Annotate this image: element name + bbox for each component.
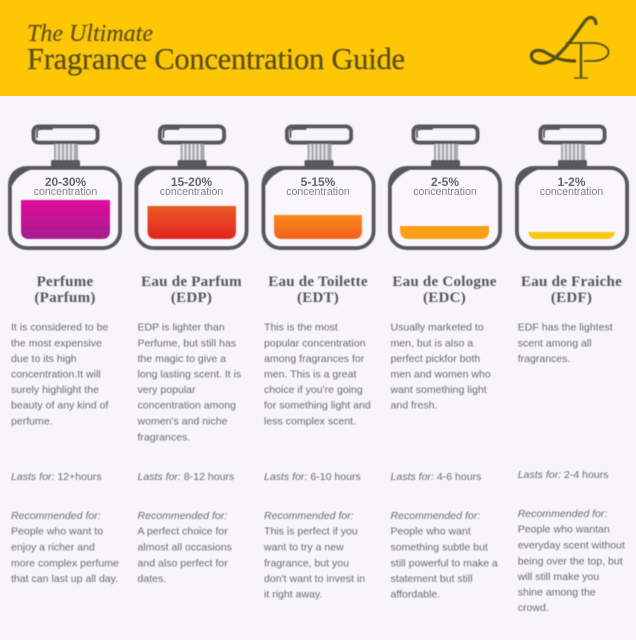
description: perfect pickfor both <box>390 353 480 365</box>
name: Perfume <box>37 274 93 290</box>
liquid level <box>528 232 615 239</box>
recommendation: more complex perfume <box>11 557 119 569</box>
header banner <box>0 0 636 96</box>
description: the magic to give a <box>138 353 226 365</box>
description: very popular <box>138 384 196 396</box>
name: (EDT) <box>297 290 339 306</box>
name: Eau de Parfum <box>141 274 242 290</box>
name <box>392 274 497 306</box>
concentration label: concentration <box>34 186 97 198</box>
name <box>141 274 242 306</box>
name <box>521 274 622 306</box>
liquid level <box>274 215 362 239</box>
description: men. This is a great <box>264 369 356 381</box>
description <box>518 322 613 365</box>
recommendation: People who wantan <box>518 524 610 536</box>
description: men and women who <box>390 369 491 381</box>
recommendation: it right away. <box>264 588 322 600</box>
bottle: eau de toilette 5-15% <box>262 126 374 248</box>
description: long lasting scent. It is <box>138 369 241 381</box>
concentration label: 20-30% <box>45 175 87 189</box>
recommendation: enjoy a richer and <box>11 542 95 554</box>
duration: Lasts for: 8-12 hours <box>138 471 234 483</box>
description: scent among all <box>518 338 592 350</box>
name: (Parfum) <box>34 290 96 306</box>
recommendation: want to try a new <box>263 542 344 554</box>
duration: Lasts for: 4-6 hours <box>390 471 481 483</box>
bottle: eau de fraiche 1-2% <box>515 126 627 248</box>
bottle outline <box>388 126 500 248</box>
description: It is considered to be <box>11 322 108 334</box>
recommendation <box>263 510 365 600</box>
title: The Ultimate <box>27 21 153 47</box>
description: concentration.It will <box>11 369 101 381</box>
description: EDF has the lightest <box>518 322 613 334</box>
concentration label: 2-5% <box>431 175 459 189</box>
recommendation: Recommended for: <box>264 510 354 522</box>
recommendation: almost all occasions <box>138 542 232 554</box>
recommendation <box>138 510 232 585</box>
description: surely highlight the <box>11 384 99 396</box>
column: eau de cologne <box>390 274 498 600</box>
recommendation: will still make you <box>517 571 599 583</box>
name <box>34 274 96 306</box>
recommendation: A perfect choice for <box>138 526 228 538</box>
liquid level <box>400 226 489 239</box>
description: men, but is also a <box>390 338 473 350</box>
description <box>264 322 371 427</box>
description: choice if you're going <box>264 384 363 396</box>
liquid level <box>148 206 236 239</box>
name: (EDP) <box>171 290 212 306</box>
column: eau de fraiche <box>517 274 625 614</box>
description: concentration among <box>138 400 236 412</box>
description: EDP is lighter than <box>138 322 225 334</box>
concentration label: concentration <box>286 186 350 198</box>
description: fragrances. <box>518 353 570 365</box>
description <box>11 322 108 427</box>
column: perfume <box>11 274 119 585</box>
recommendation: Recommended for: <box>518 508 607 520</box>
concentration label: 5-15% <box>301 175 336 189</box>
concentration label: 15-20% <box>171 175 213 189</box>
name: (EDC) <box>423 290 466 306</box>
column: eau de toilette <box>263 274 371 600</box>
recommendation: still powerful to make a <box>390 557 498 569</box>
description: Usually marketed to <box>390 322 484 334</box>
recommendation: something subtle but <box>390 542 488 554</box>
duration: Lasts for: 2-4 hours <box>518 469 609 481</box>
title: Fragrance Concentration Guide <box>27 42 405 76</box>
name <box>268 274 368 306</box>
description: beauty of any kind of <box>11 400 108 412</box>
recommendation: Recommended for: <box>390 510 480 522</box>
concentration label: concentration <box>540 186 603 198</box>
recommendation <box>11 510 119 585</box>
description: the most expensive <box>11 338 102 350</box>
bottle: eau de parfum 15-20% <box>135 126 246 248</box>
description: fragrances. <box>138 431 190 443</box>
concentration label: concentration <box>160 186 223 198</box>
description: Perfume, but still has <box>138 338 236 350</box>
bottle: perfume 20-30% <box>8 126 120 248</box>
recommendation: This is perfect if you <box>264 526 358 538</box>
name: Eau de Cologne <box>392 274 497 290</box>
concentration label <box>286 175 350 198</box>
description: among fragrances for <box>264 353 365 365</box>
name: Eau de Fraiche <box>521 274 622 290</box>
recommendation: statement but still <box>390 573 473 585</box>
recommendation: that can last up all day. <box>11 573 118 585</box>
recommendation: dates. <box>138 573 166 585</box>
liquid level <box>21 200 110 239</box>
description: popular concentration <box>264 338 366 350</box>
description <box>390 322 491 412</box>
description <box>136 322 241 443</box>
recommendation: shine among the <box>518 586 596 598</box>
recommendation: People who want <box>390 526 471 538</box>
duration: Lasts for: 6-10 hours <box>264 471 361 483</box>
recommendation: everyday scent without <box>518 540 625 552</box>
duration: Lasts for: 12+hours <box>11 471 102 483</box>
description: less complex scent. <box>264 415 356 427</box>
name: (EDF) <box>551 290 592 306</box>
bottle outline <box>135 126 246 248</box>
recommendation: affordable. <box>390 588 440 600</box>
recommendation <box>390 510 498 600</box>
bottle outline <box>515 126 627 248</box>
recommendation: don't want to invest in <box>264 573 365 585</box>
concentration label <box>160 175 223 198</box>
column: eau de parfum <box>136 274 242 585</box>
recommendation: and also perfect for <box>138 557 228 569</box>
recommendation: People who want to <box>11 526 103 538</box>
logo: LP monogram <box>531 18 608 78</box>
concentration label <box>540 175 603 198</box>
title <box>27 21 405 76</box>
recommendation: Recommended for: <box>138 510 227 522</box>
recommendation <box>517 508 625 614</box>
concentration label <box>34 175 97 198</box>
recommendation: Recommended for: <box>11 510 101 522</box>
bottle outline <box>262 126 374 248</box>
description: women's and niche <box>136 415 228 427</box>
concentration label: 1-2% <box>557 175 586 189</box>
description: for something light and <box>264 400 371 412</box>
recommendation: crowd. <box>518 602 549 614</box>
description: want something light <box>390 384 487 396</box>
description: and fresh. <box>390 400 437 412</box>
description: due to its high <box>11 353 77 365</box>
name: Eau de Toilette <box>268 274 368 290</box>
description: This is the most <box>264 322 338 334</box>
bottle outline <box>8 126 120 248</box>
concentration label: concentration <box>413 186 477 198</box>
bottle: eau de cologne 2-5% <box>388 126 500 248</box>
concentration label <box>413 175 477 198</box>
description: perfume. <box>11 415 53 427</box>
recommendation: fragrance, but you <box>264 557 349 569</box>
recommendation: being over the top, but <box>518 555 623 567</box>
